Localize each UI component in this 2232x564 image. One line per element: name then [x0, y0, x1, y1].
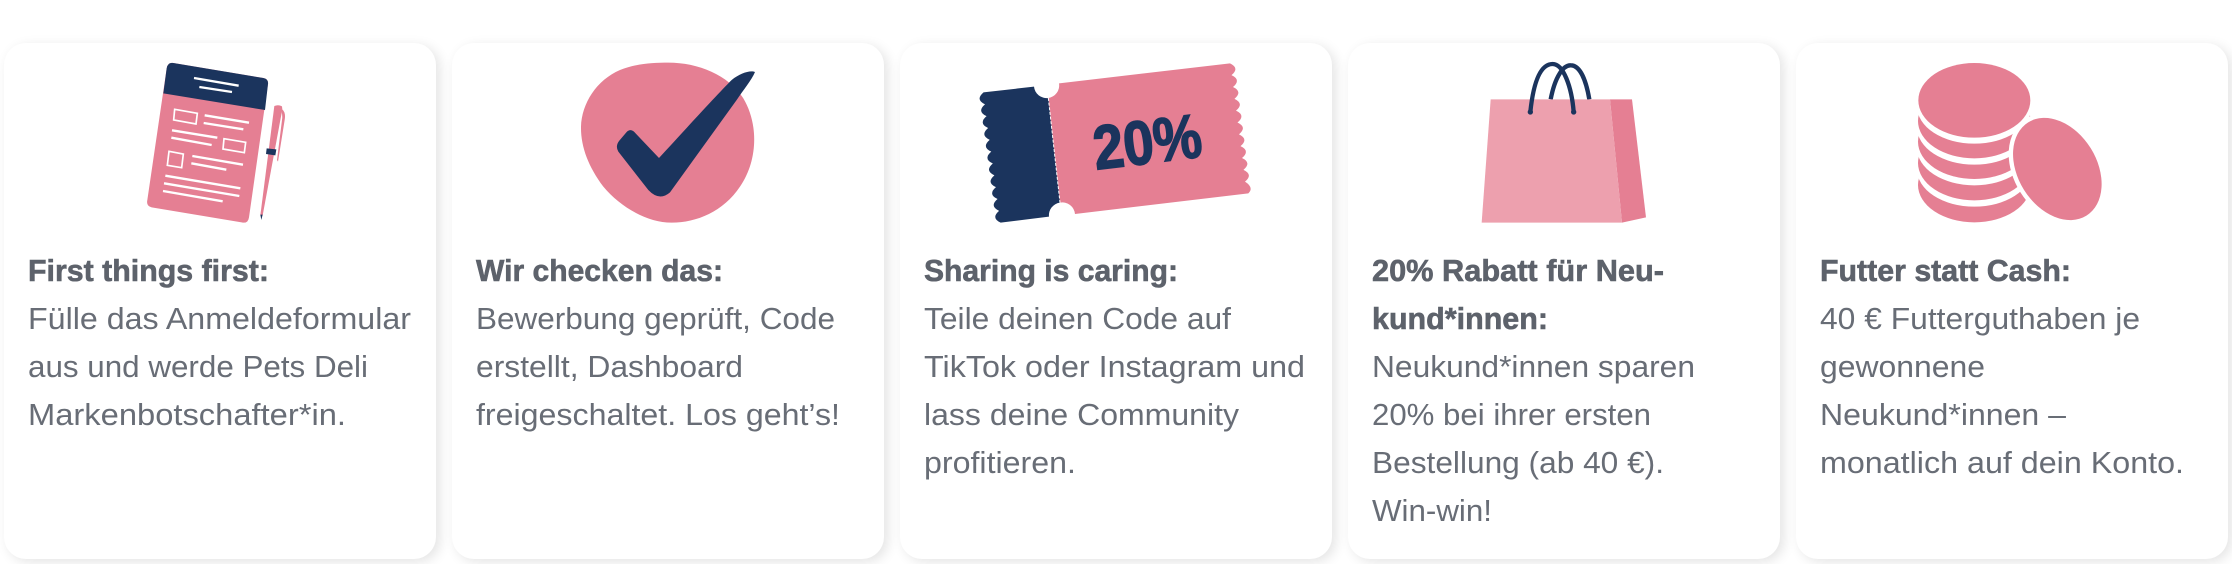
heading: sharing is caring: Sharing is caring:	[924, 253, 1178, 288]
text: step 2 description: Bewerbung geprüft, Code	[476, 301, 835, 336]
icon: coin stack	[1917, 63, 2120, 236]
heading: wir checken das: Wir checken das:	[476, 253, 723, 288]
text: step 2 description: erstellt, Dashboard	[476, 349, 743, 384]
text: step 5 description: monatlich auf dein Konto.	[1820, 445, 2184, 480]
text: step 1 description: Fülle das Anmeldeformular	[28, 301, 411, 336]
text: step 3 description: Teile deinen Code auf	[924, 301, 1231, 336]
icon: shopping bag	[1482, 64, 1646, 223]
text: step 5 description	[1820, 301, 2184, 480]
text: step 5 description: 40 € Futterguthaben je	[1820, 301, 2140, 336]
text: step 3 description: TikTok oder Instagram und	[924, 349, 1305, 384]
icon: check mark on blob	[581, 63, 755, 223]
text: step 4 description: Bestellung (ab 40 €).	[1372, 445, 1664, 480]
heading: 20 percent rabatt	[1372, 253, 1664, 336]
heading: 20 percent rabatt: 20% Rabatt für Neu-	[1372, 253, 1664, 288]
heading: 20 percent rabatt: kund*innen:	[1372, 301, 1548, 336]
text: step 4 description: Neukund*innen sparen	[1372, 349, 1695, 384]
icon: 20 percent ticket	[980, 63, 1251, 223]
panel: step 1 first things first	[4, 43, 436, 559]
text: step 1 description: Markenbotschafter*in.	[28, 397, 346, 432]
text: step 3 description: profitieren.	[924, 445, 1076, 480]
text: step 2 description: freigeschaltet. Los geht’s!	[476, 397, 840, 432]
panel: step 3 sharing is caring	[900, 43, 1332, 559]
panel: step 5 futter statt cash	[1796, 43, 2228, 559]
text: step 5 description: Neukund*innen –	[1820, 397, 2067, 432]
panel: step 4 20 percent rabatt	[1348, 43, 1780, 559]
text: step 1 description: aus und werde Pets Deli	[28, 349, 368, 384]
text: step 2 description	[476, 301, 840, 432]
heading: first things first: First things first:	[28, 253, 269, 288]
text: step 4 description	[1372, 349, 1695, 528]
text: step 4 description: Win-win!	[1372, 493, 1492, 528]
text: step 3 description: lass deine Community	[924, 397, 1240, 432]
panel: step 2 wir checken das	[452, 43, 884, 559]
icon: 20 percent ticket: 20%	[1089, 102, 1206, 184]
text: step 3 description	[924, 301, 1305, 480]
text: step 5 description: gewonnene	[1820, 349, 1985, 384]
heading: futter statt cash: Futter statt Cash:	[1820, 253, 2071, 288]
text: step 4 description: 20% bei ihrer ersten	[1372, 397, 1651, 432]
icon: form and pen	[147, 63, 285, 223]
text: step 1 description	[28, 301, 411, 432]
